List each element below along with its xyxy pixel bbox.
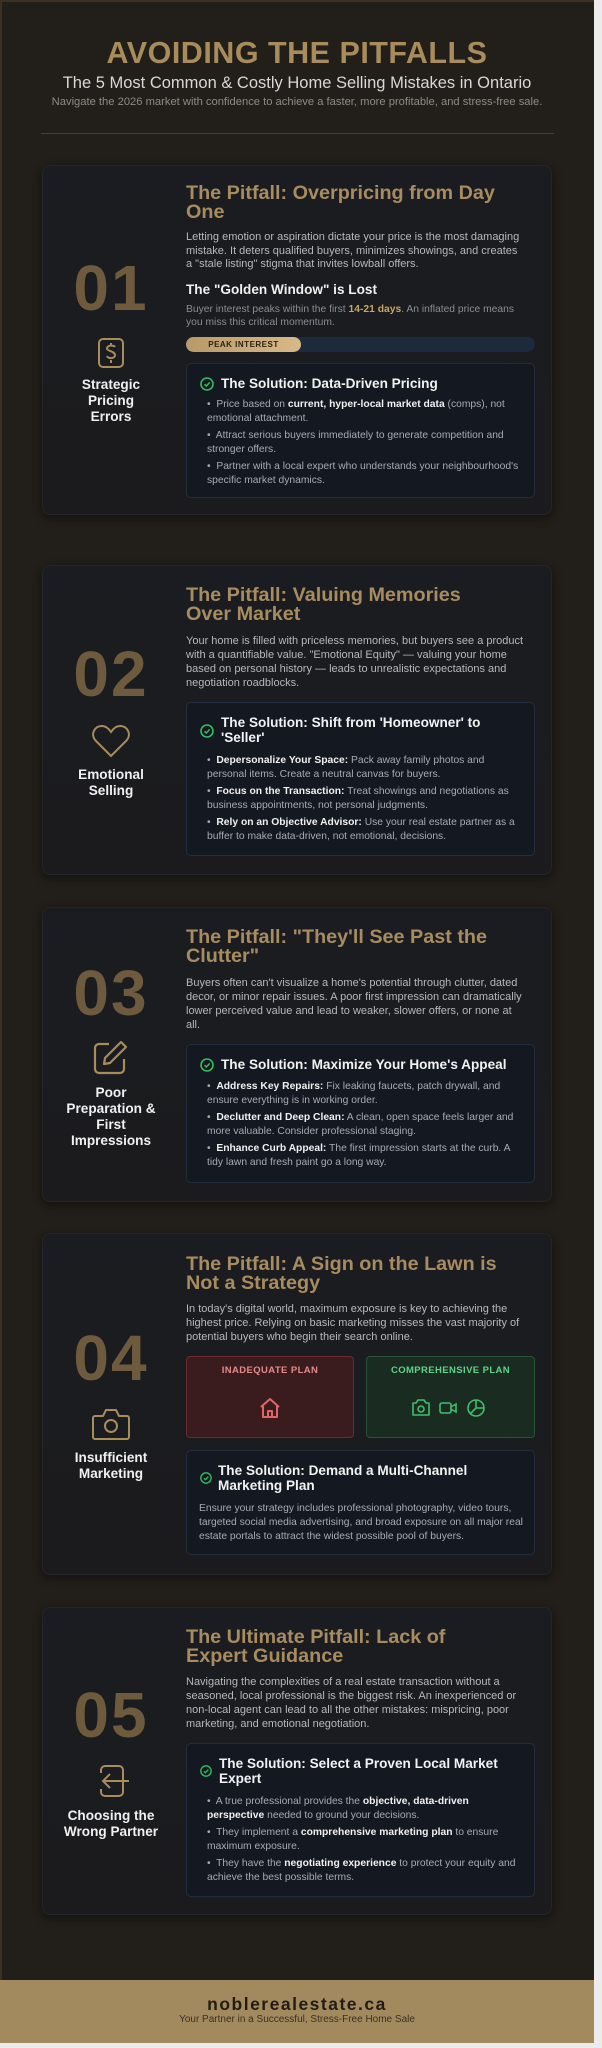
label: First xyxy=(96,1117,126,1132)
solution text: Ensure your strategy includes professional photography, video tours, xyxy=(199,1503,511,1514)
bullets xyxy=(207,1796,515,1882)
subtitle: The 5 Most Common & Costly Home Selling Mistakes in Ontario xyxy=(63,74,531,92)
bullets: business appointments, not personal judgments. xyxy=(207,800,428,810)
bullets: more valuable. Consider professional staging. xyxy=(207,1126,416,1136)
bullets: • Focus on the Transaction: Treat showings and negotiations as xyxy=(207,786,509,797)
panel: comprehensive plan xyxy=(366,1356,535,1438)
bullets: ensure everything is in working order. xyxy=(207,1094,378,1106)
golden window text xyxy=(186,304,514,328)
label: Strategic xyxy=(82,377,140,392)
label xyxy=(82,377,140,424)
solution heading: The Solution: Select a Proven Local Market xyxy=(219,1756,498,1771)
number 03: 03 xyxy=(73,957,149,1029)
body text: potential buyers who begin their search online. xyxy=(186,1331,413,1343)
label: Errors xyxy=(91,409,131,424)
footer xyxy=(0,1980,594,2043)
label: Marketing xyxy=(79,1466,143,1481)
body text: negotiation roadblocks. xyxy=(186,677,299,689)
label: Insufficient xyxy=(75,1450,147,1465)
solution heading: Marketing Plan xyxy=(218,1478,315,1493)
body text: based on personal history — leads to unrealistic expectations and xyxy=(186,663,506,675)
panel: 01 overpricing xyxy=(42,165,552,515)
label xyxy=(78,767,144,798)
label xyxy=(75,1450,148,1481)
heading: The Pitfall: A Sign on the Lawn is xyxy=(186,1253,497,1275)
body text: In today's digital world, maximum exposure is key to achieving the xyxy=(186,1303,507,1315)
heading xyxy=(186,182,495,223)
icon: check xyxy=(200,377,214,391)
icon: check xyxy=(200,1765,212,1777)
chart: interest bar xyxy=(186,337,535,352)
tagline: Navigate the 2026 market with confidence to achieve a faster, more profitable, and stress-free sale. xyxy=(52,96,542,108)
body text xyxy=(186,977,522,1031)
golden window text: you miss this critical momentum. xyxy=(186,317,335,328)
number 02: 02 xyxy=(73,638,149,710)
body text: a "stale listing" stigma that invites lowball offers. xyxy=(186,258,419,270)
bullets: • Rely on an Objective Advisor: Use your real estate partner as a xyxy=(207,817,515,828)
label: Preparation & xyxy=(66,1101,156,1116)
label: Impressions xyxy=(71,1133,151,1148)
bullets: • Partner with a local expert who understands your neighbourhood's xyxy=(207,461,518,472)
icon: check xyxy=(200,724,214,738)
bullets xyxy=(207,1081,513,1168)
body text: mistake. It deters qualified buyers, minimizes showings, and creates xyxy=(186,244,517,256)
body text xyxy=(186,231,519,270)
label: Wrong Partner xyxy=(64,1824,158,1839)
label: Emotional xyxy=(78,767,144,782)
icon: check xyxy=(200,1472,212,1484)
body text: all. xyxy=(186,1019,200,1031)
body text: marketing, and emotional negotiation. xyxy=(186,1718,369,1730)
website: noblerealestate.ca xyxy=(207,1994,387,2014)
label: Choosing the xyxy=(68,1808,154,1823)
body text: Your home is filled with priceless memories, but buyers see a product xyxy=(186,635,523,647)
body text: decor, or minor repair issues. A poor first impression can dramatically xyxy=(186,991,522,1003)
icons: camera video chart xyxy=(412,1399,485,1417)
golden window heading: The "Golden Window" is Lost xyxy=(186,282,377,297)
bullets: • Attract serious buyers immediately to generate competition and xyxy=(207,430,504,441)
heading: The Pitfall: "They'll See Past the xyxy=(186,926,487,948)
bullets: achieve the best possible terms. xyxy=(207,1872,354,1882)
chart: interest bar: PEAK INTEREST xyxy=(208,340,279,349)
solution text: targeted social media advertising, and broad exposure on all major real xyxy=(199,1517,523,1528)
icon: dollar document xyxy=(98,338,124,368)
solution box xyxy=(186,1044,535,1183)
label: Pricing xyxy=(88,393,134,408)
panel: 05 wrong partner xyxy=(42,1607,552,1915)
bullets: • They have the negotiating experience to protect your equity and xyxy=(207,1858,515,1869)
heading xyxy=(186,584,461,625)
bullets: • They implement a comprehensive marketing plan to ensure xyxy=(207,1827,498,1838)
panel: 03 poor preparation xyxy=(42,907,552,1202)
number 04: 04 xyxy=(73,1322,149,1394)
bullets: • A true professional provides the objective, data-driven xyxy=(207,1796,469,1807)
heading: Over Market xyxy=(186,603,300,625)
number 05: 05 xyxy=(73,1679,149,1751)
title: AVOIDING THE PITFALLS xyxy=(106,36,488,70)
body text xyxy=(186,635,523,689)
body text: Navigating the complexities of a real estate transaction without a xyxy=(186,1676,500,1688)
footer tagline: Your Partner in a Successful, Stress-Free Home Sale xyxy=(179,2014,415,2025)
heading: The Pitfall: Overpricing from Day xyxy=(186,182,495,204)
icon: enter arrow xyxy=(100,1765,129,1797)
body text: non-local agent can lead to all the other mistakes: mispricing, poor xyxy=(186,1704,509,1716)
heading: Clutter" xyxy=(186,945,259,967)
bullets: • Price based on current, hyper-local market data (comps), not xyxy=(207,399,505,410)
solution box xyxy=(186,363,535,498)
body text: lower perceived value and lead to weaker, slower offers, or none at xyxy=(186,1005,512,1017)
heading xyxy=(186,926,487,967)
solution box xyxy=(186,1450,535,1555)
bullets: stronger offers. xyxy=(207,444,276,454)
heading: The Ultimate Pitfall: Lack of xyxy=(186,1626,445,1648)
label: Selling xyxy=(89,783,133,798)
solution heading xyxy=(221,715,480,745)
icon: check xyxy=(200,1058,214,1072)
heading: One xyxy=(186,201,224,223)
bullets: specific market dynamics. xyxy=(207,474,325,486)
solution box xyxy=(186,702,535,856)
solution heading xyxy=(219,1756,498,1786)
bullets xyxy=(207,755,515,842)
heading: Not a Strategy xyxy=(186,1272,320,1294)
bullets: buffer to make data-driven, not emotional, decisions. xyxy=(207,830,446,842)
heading: The Pitfall: Valuing Memories xyxy=(186,584,461,606)
body text: seasoned, local professional is the biggest risk. An inexperienced or xyxy=(186,1690,516,1702)
label xyxy=(64,1808,158,1839)
solution text xyxy=(199,1503,523,1542)
panel: 04 insufficient marketing xyxy=(42,1233,552,1575)
icon: heart xyxy=(92,725,130,758)
heading xyxy=(186,1253,497,1294)
body text: Letting emotion or aspiration dictate your price is the most damaging xyxy=(186,231,519,243)
solution heading: The Solution: Data-Driven Pricing xyxy=(221,376,438,391)
label xyxy=(66,1085,156,1148)
heading: Expert Guidance xyxy=(186,1644,343,1666)
solution box xyxy=(186,1743,535,1897)
body text: highest price. Relying on basic marketing misses the vast majority of xyxy=(186,1317,519,1329)
heading xyxy=(186,1626,446,1666)
bullets: • Address Key Repairs: Fix leaking faucets, patch drywall, and xyxy=(207,1081,500,1092)
bullets: emotional attachment. xyxy=(207,412,308,424)
label: COMPREHENSIVE PLAN xyxy=(391,1365,510,1376)
solution heading: The Solution: Demand a Multi-Channel xyxy=(218,1463,467,1478)
bullets: perspective needed to ground your decisions. xyxy=(207,1810,419,1820)
bullets: personal items. Create a neutral canvas for buyers. xyxy=(207,768,441,780)
icon: edit xyxy=(94,1040,128,1074)
panel: 02 emotional selling xyxy=(42,565,552,875)
body text: Buyers often can't visualize a home's potential through clutter, dated xyxy=(186,977,517,989)
body text xyxy=(186,1303,520,1343)
number 01: 01 xyxy=(73,252,149,324)
body text: with a quantifiable value. "Emotional Equity" — valuing your home xyxy=(186,649,507,661)
solution heading: The Solution: Maximize Your Home's Appeal xyxy=(221,1057,506,1072)
icon: camera xyxy=(92,1409,130,1440)
label: Poor xyxy=(96,1085,126,1100)
bullets: tidy lawn and fresh paint go a long way. xyxy=(207,1156,387,1168)
header xyxy=(52,36,542,108)
solution heading: The Solution: Shift from 'Homeowner' to xyxy=(221,715,480,730)
bullets: • Depersonalize Your Space: Pack away family photos and xyxy=(207,755,484,766)
bullets xyxy=(207,399,518,486)
bullets: • Declutter and Deep Clean: A clean, open space feels larger and xyxy=(207,1112,513,1123)
solution heading: Expert xyxy=(219,1771,261,1786)
bullets: • Enhance Curb Appeal: The first impression starts at the curb. A xyxy=(207,1143,510,1154)
label: INADEQUATE PLAN xyxy=(222,1365,318,1376)
bullets: maximum exposure. xyxy=(207,1840,300,1852)
golden window text: Buyer interest peaks within the first 14-21 days. An inflated price means xyxy=(186,304,514,315)
solution heading xyxy=(218,1463,467,1493)
body text xyxy=(186,1676,516,1730)
solution text: estate portals to attract the widest possible pool of buyers. xyxy=(199,1531,464,1542)
panel: inadequate plan xyxy=(186,1356,354,1438)
icon: house xyxy=(260,1398,280,1418)
solution heading: 'Seller' xyxy=(221,730,264,745)
